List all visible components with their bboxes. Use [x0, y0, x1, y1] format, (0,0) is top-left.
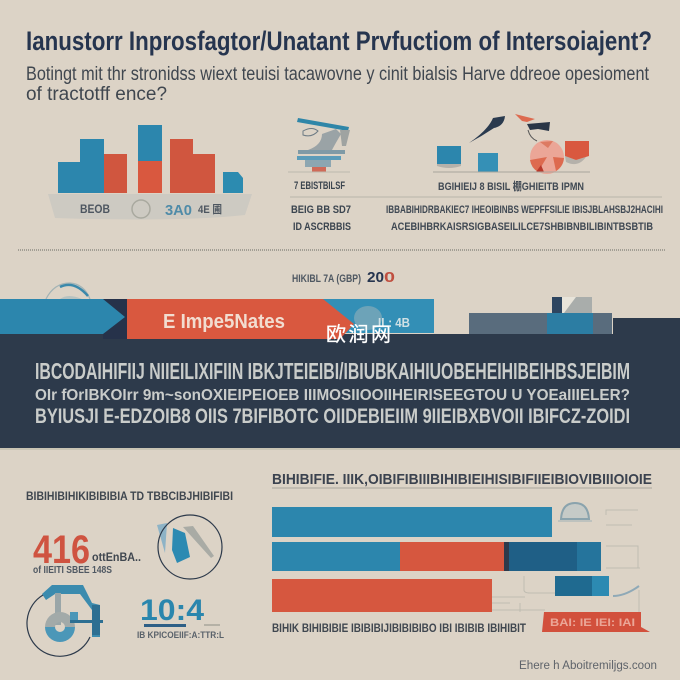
stat: red number: ottEnBA..	[92, 550, 141, 564]
icon: arc behind banner	[46, 283, 90, 299]
red arrow label: E Impe5Nates	[163, 311, 285, 333]
band paragraph: OIr fOrIBKOIrr 9m~sonOXIEIPEIOEB IIIMOSIIOOIIHEIRISEEGTOU U YOEaIIIELER?	[35, 387, 630, 404]
banner: arrows	[0, 299, 434, 339]
caption under bars: BIHIK BIHIBIBIE IBIBIBIJIBIBIBIBO IBI IBIBIB IBIHIBIT	[272, 621, 527, 635]
paper plane	[515, 114, 535, 122]
column text: right	[386, 179, 663, 233]
column text: right: BGIHIEIJ 8 BISIL 棚GHIEITB IPMN	[438, 179, 584, 193]
red box	[565, 156, 586, 164]
icon: gauge circle	[27, 585, 103, 656]
column text: left: 7 EBISTBILSF	[294, 180, 345, 192]
bar chart panel	[48, 125, 252, 219]
stat: red number: 416	[33, 528, 90, 572]
chart legend	[80, 200, 222, 219]
mid caption with year: 0	[384, 269, 395, 286]
blue arrow	[0, 299, 125, 334]
stat: blue number	[137, 594, 224, 640]
chart legend: BEOB	[80, 202, 110, 216]
column text: left: BEIG BB SD7	[291, 204, 351, 216]
band paragraph	[35, 358, 630, 428]
icon: shapes and arrow	[437, 114, 589, 174]
icon: clock circle	[157, 515, 222, 579]
column text: left	[291, 180, 351, 233]
blue boxes	[437, 162, 461, 168]
dark band	[0, 318, 680, 448]
stat: red number: of IIEITI SBEE 148S	[33, 565, 112, 576]
arrow	[469, 116, 505, 143]
mid caption with year	[292, 269, 395, 286]
mid caption with year: 20	[367, 269, 384, 286]
stat: blue number: IB KPICOEIIF:A:TTR:L	[137, 630, 224, 640]
chart base plate	[48, 194, 252, 219]
red badge: BAI: IE IEI: IAI	[550, 617, 635, 629]
column text: left: ID ASCRBBIS	[293, 221, 351, 233]
panel: bottom-left stats	[26, 489, 233, 656]
chart bars	[58, 125, 243, 193]
mid caption with year: HIKIBL 7A (GBP)	[292, 273, 361, 285]
chart legend: 4E 圃	[198, 203, 222, 216]
red arrow label	[127, 299, 354, 339]
right block shapes	[469, 297, 612, 334]
panel: bottom-right bars	[272, 471, 652, 635]
red badge	[542, 612, 650, 632]
blue tail	[323, 299, 434, 333]
watermark: 欧润网	[326, 318, 391, 347]
panel heading: BIBIHIBIHIKIBIBIBIA TD TBBCIBJHIBIFIBI	[26, 489, 233, 503]
subtitle: of tractotff ence?	[26, 84, 167, 105]
bar row 3	[272, 576, 609, 612]
blue tail detail	[354, 306, 410, 330]
bar row 2	[272, 542, 601, 571]
dark wedge	[103, 299, 127, 339]
stat: red number	[33, 528, 141, 576]
panel heading: BIHIBIFIE. IIIK,OIBIFIBIIIBIHIBIEIHISIBIFIIEIBIOVIBIIIOIOIE	[272, 471, 652, 488]
footer source: Ehere h Aboitremiljgs.coon	[519, 660, 657, 672]
pie	[530, 140, 564, 174]
faint icons	[492, 503, 640, 612]
icon: machine	[297, 118, 350, 172]
chart legend: 3A0	[165, 202, 192, 219]
blue tail detail: IL: 4B	[378, 315, 410, 330]
stat: blue number: 10:4	[140, 594, 204, 627]
subtitle	[26, 64, 650, 105]
bar row 1	[272, 507, 552, 537]
